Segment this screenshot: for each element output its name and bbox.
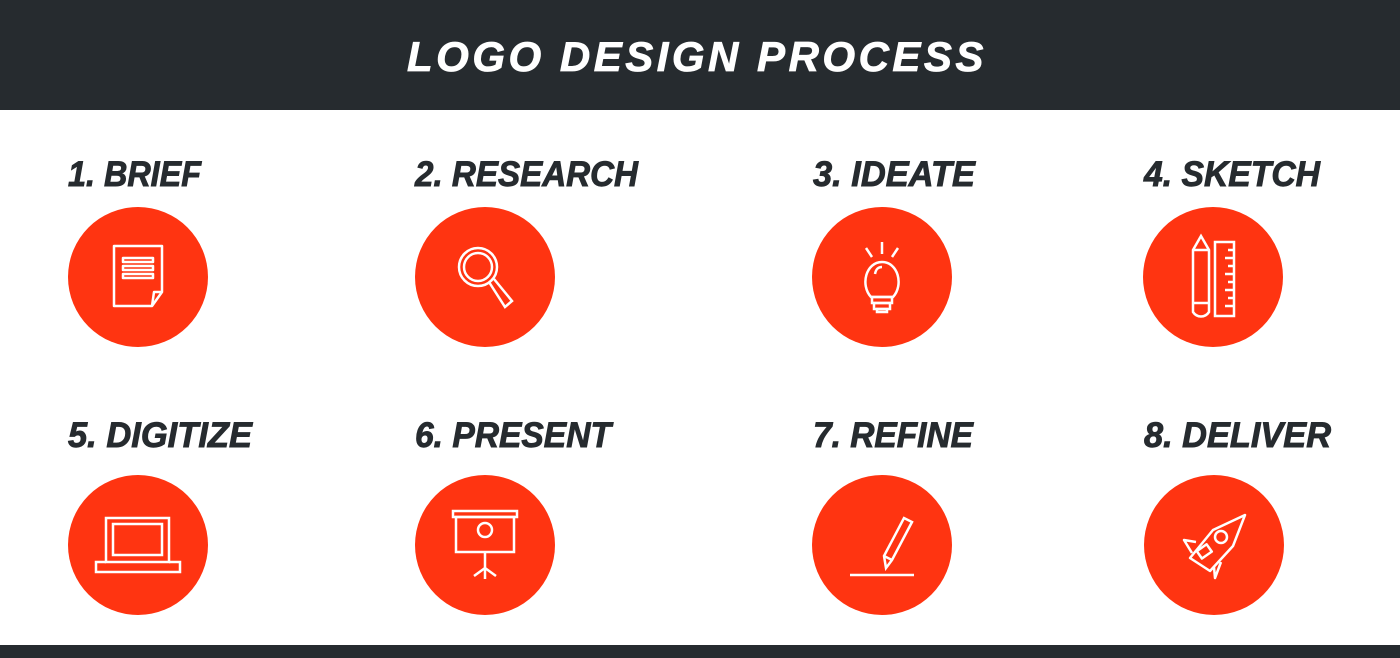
title: LOGO DESIGN PROCESS bbox=[407, 33, 987, 80]
icon: refine pen bbox=[812, 475, 952, 615]
footer bar bbox=[0, 645, 1400, 658]
icon: digitize laptop bbox=[68, 475, 208, 615]
step 8 label: 8. DELIVER bbox=[1144, 416, 1332, 455]
icon: sketch pencil and ruler bbox=[1143, 207, 1283, 347]
step 1 label: 1. BRIEF bbox=[68, 155, 202, 194]
header bar bbox=[0, 0, 1400, 110]
step 4 label: 4. SKETCH bbox=[1143, 155, 1321, 194]
step 5 label: 5. DIGITIZE bbox=[68, 416, 254, 455]
icon: deliver rocket bbox=[1144, 475, 1284, 615]
icon: research magnifier bbox=[415, 207, 555, 347]
step 2 label: 2. RESEARCH bbox=[414, 155, 639, 194]
icon: brief document bbox=[68, 207, 208, 347]
step 6 label: 6. PRESENT bbox=[415, 416, 614, 455]
icon: present board bbox=[415, 475, 555, 615]
step 7 label: 7. REFINE bbox=[813, 416, 975, 455]
icon: ideate bulb bbox=[812, 207, 952, 347]
step 3 label: 3. IDEATE bbox=[813, 155, 977, 194]
